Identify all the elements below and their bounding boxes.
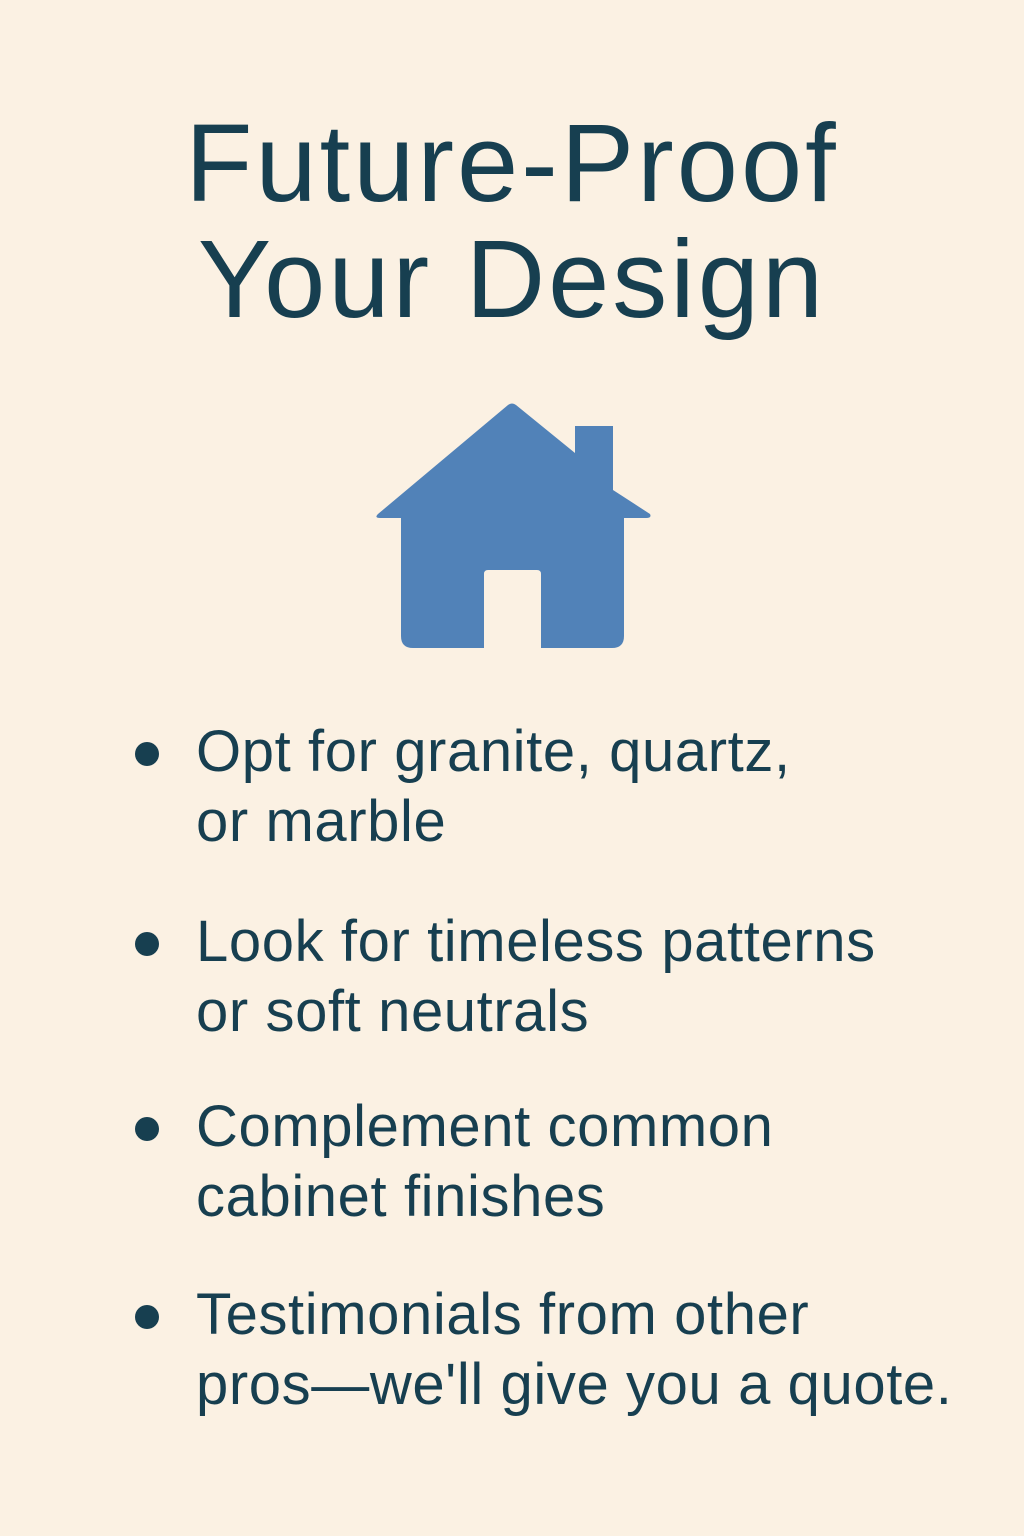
bullet 2: or soft neutrals [196, 979, 589, 1044]
bullet 3 [135, 1094, 774, 1229]
bullet 1: or marble [196, 789, 446, 854]
bullet 4: pros—we'll give you a quote. [196, 1352, 952, 1417]
bullet 3: cabinet finishes [196, 1164, 605, 1229]
bullet 4: Testimonials from other [196, 1282, 809, 1347]
icon: house [376, 404, 650, 648]
bullet 1 [135, 719, 791, 854]
title: Future-Proof [185, 102, 839, 225]
title [185, 102, 839, 341]
bullet 1: Opt for granite, quartz, [196, 719, 791, 784]
title: Your Design [198, 218, 826, 341]
bullet 4 [135, 1282, 952, 1417]
bullet 3: Complement common [196, 1094, 774, 1159]
bullet 2: Look for timeless patterns [196, 909, 876, 974]
bullet 2 [135, 909, 876, 1044]
